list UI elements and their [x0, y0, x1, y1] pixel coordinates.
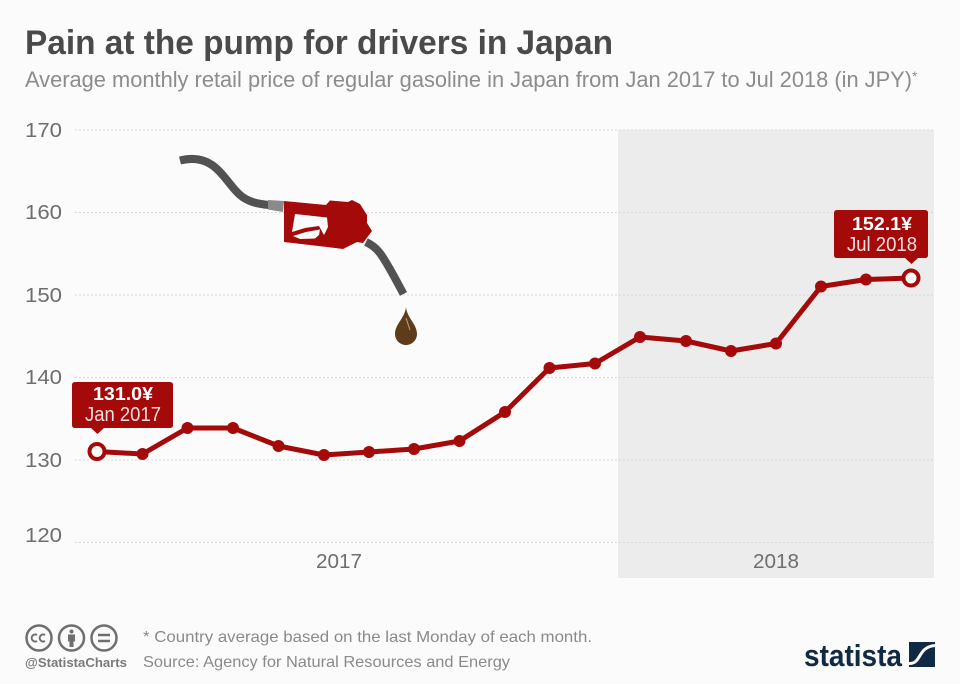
title: Pain at the pump for drivers in Japan — [25, 24, 613, 62]
no-derivatives badge — [92, 626, 116, 650]
x axis labels: 2017 — [316, 551, 362, 573]
callout: Jan 2017 — [72, 382, 173, 434]
x axis labels — [316, 551, 799, 573]
oil drop — [395, 307, 417, 345]
callout: Jul 2018: 152.1¥ — [852, 213, 913, 234]
spout — [366, 242, 404, 294]
attribution badge — [59, 626, 84, 650]
y axis labels — [25, 120, 62, 547]
hose — [180, 159, 269, 205]
statista logo: statista — [804, 638, 903, 673]
y axis labels: 160 — [25, 202, 62, 224]
y axis labels: 140 — [25, 367, 62, 389]
trigger opening — [292, 214, 328, 235]
shaded band: 2018 — [618, 130, 934, 578]
nozzle body — [284, 200, 372, 249]
icon: fuel pump nozzle — [180, 159, 417, 345]
y axis labels: 120 — [25, 525, 62, 547]
y axis labels: 130 — [25, 450, 62, 472]
callout: Jan 2017: Jan 2017 — [85, 404, 161, 426]
social handle: @StatistaCharts — [25, 655, 127, 670]
subtitle: Average monthly retail price of regular gasoline in Japan from Jan 2017 to Jul 2018 (in JPY) — [25, 67, 912, 92]
trigger gap — [293, 230, 320, 239]
callout: Jul 2018: Jul 2018 — [847, 234, 917, 256]
callout: Jan 2017: 131.0¥ — [93, 383, 154, 404]
line chart — [90, 270, 918, 461]
subtitle: * — [912, 68, 918, 84]
footnote: * Country average based on the last Monday of each month. — [143, 629, 592, 646]
callout: Jul 2018 — [834, 210, 928, 264]
chart gridlines — [75, 130, 934, 542]
cc badge — [26, 626, 52, 650]
x axis labels: 2018 — [753, 551, 799, 573]
logo mark — [909, 642, 935, 667]
source: Source: Agency for Natural Resources and Energy — [143, 654, 510, 671]
y axis labels: 170 — [25, 120, 62, 142]
y axis labels: 150 — [25, 285, 62, 307]
hose collar — [268, 200, 284, 212]
icon: license badges — [26, 626, 116, 650]
